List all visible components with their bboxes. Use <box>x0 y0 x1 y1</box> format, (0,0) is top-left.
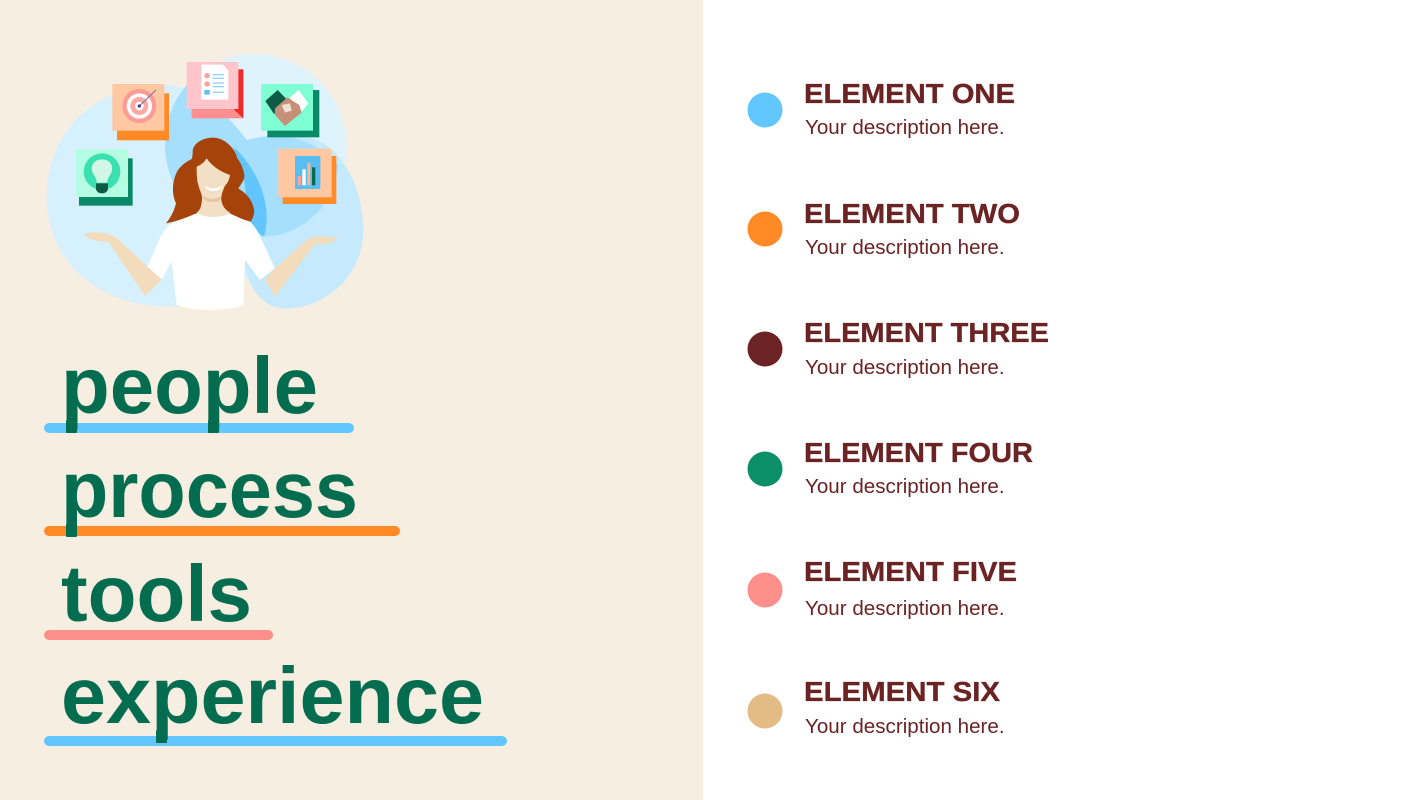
list item: element one: Your description here. <box>805 116 1005 139</box>
heading: people: people <box>61 341 318 430</box>
list item: element six <box>748 676 1005 738</box>
list item: element three: Your description here. <box>805 356 1005 379</box>
list item: element six: Your description here. <box>805 715 1005 738</box>
chin shadow <box>202 195 222 202</box>
list item: element five: ELEMENT FIVE <box>804 556 1017 587</box>
list item: element six: ELEMENT SIX <box>804 676 1000 707</box>
list item: element two: ELEMENT TWO <box>804 198 1020 229</box>
list item: element three: ELEMENT THREE <box>804 317 1049 348</box>
list item: element two <box>748 198 1020 259</box>
icon: light bulb <box>76 149 133 206</box>
underline <box>44 630 273 640</box>
list item: element two: Your description here. <box>805 236 1005 259</box>
list item: element one: ELEMENT ONE <box>804 78 1015 109</box>
list item: element one <box>748 78 1015 139</box>
list item: element four: ELEMENT FOUR <box>804 437 1033 468</box>
underline <box>44 526 400 536</box>
face and neck <box>197 158 230 217</box>
panel: left beige background <box>0 0 703 800</box>
icon: handshake <box>261 84 319 137</box>
heading: tools: tools <box>61 549 252 638</box>
arms <box>84 232 162 296</box>
illustration: woman juggling work icons <box>47 54 363 310</box>
heading: process: process <box>61 445 358 534</box>
list item: element four <box>748 437 1033 498</box>
underline <box>44 423 354 433</box>
list item: element five: Your description here. <box>805 597 1005 620</box>
figure: woman <box>84 138 337 310</box>
underline <box>44 736 507 746</box>
shirt <box>147 213 275 310</box>
list item: element five <box>748 556 1017 620</box>
list item: element four: Your description here. <box>805 475 1005 498</box>
list item: element three <box>748 317 1049 379</box>
icon: bar chart <box>278 149 336 204</box>
heading: experience: experience <box>61 651 484 740</box>
icon: checklist document <box>187 62 243 118</box>
smile <box>205 185 223 191</box>
hair <box>166 138 254 223</box>
background blobs <box>47 54 363 308</box>
icon: target <box>112 84 169 140</box>
